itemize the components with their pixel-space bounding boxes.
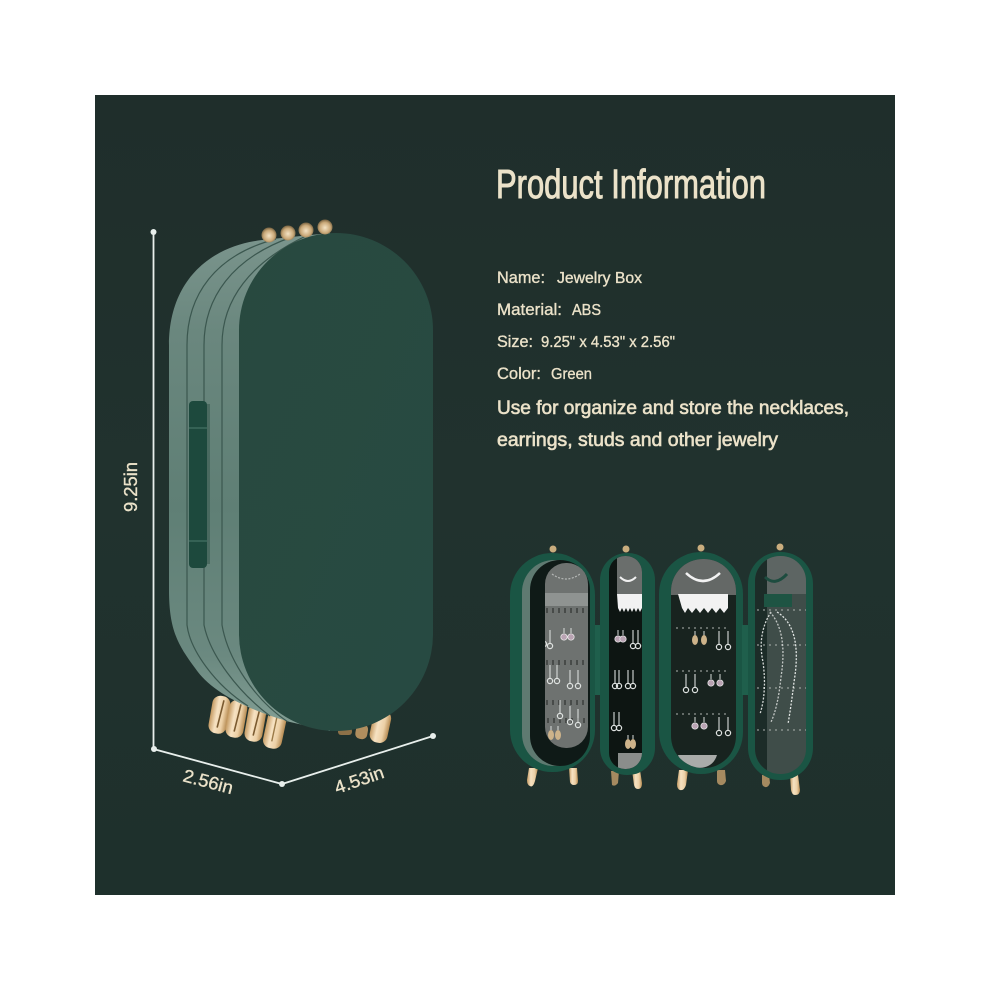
- box front face: [239, 233, 433, 731]
- product: open jewelry box panels: [510, 544, 813, 795]
- name row: [497, 268, 642, 287]
- size row: 9.25" x 4.53" x 2.56": [541, 334, 675, 351]
- usage description: [497, 398, 849, 451]
- material row: Material:: [497, 300, 562, 319]
- size row: [497, 332, 675, 351]
- box seam lines: [187, 235, 308, 722]
- icon: gold knobs on top: [262, 220, 332, 242]
- material row: ABS: [572, 302, 601, 319]
- product information list: [497, 268, 849, 451]
- color row: Color:: [497, 364, 541, 383]
- color row: [497, 364, 592, 383]
- icon: open box feet: [527, 768, 800, 795]
- icon: gold feet: [207, 694, 393, 750]
- panel: third door: [659, 552, 743, 774]
- name row: Jewelry Box: [557, 270, 642, 287]
- usage description: earrings, studs and other jewelry: [497, 430, 778, 451]
- size row: Size:: [497, 332, 533, 351]
- dimension label: width: 4.53in: [332, 762, 387, 798]
- icon: finials: [550, 544, 784, 552]
- panel: first door: [510, 553, 595, 772]
- box side layers: [169, 233, 330, 731]
- color row: Green: [551, 366, 592, 383]
- panel: second door: [595, 553, 655, 775]
- background panel: [95, 95, 895, 895]
- title: Product Information: [496, 161, 766, 207]
- usage description: Use for organize and store the necklaces,: [497, 398, 849, 419]
- product: closed jewelry box: [169, 220, 433, 750]
- panel: fourth door: [742, 552, 813, 780]
- name row: Name:: [497, 268, 545, 287]
- material row: [497, 300, 601, 319]
- dimension label: depth: 2.56in: [181, 766, 235, 798]
- dimension lines: [150, 229, 436, 787]
- dimension label: height: 9.25in: [121, 462, 141, 512]
- box handle: [189, 401, 210, 568]
